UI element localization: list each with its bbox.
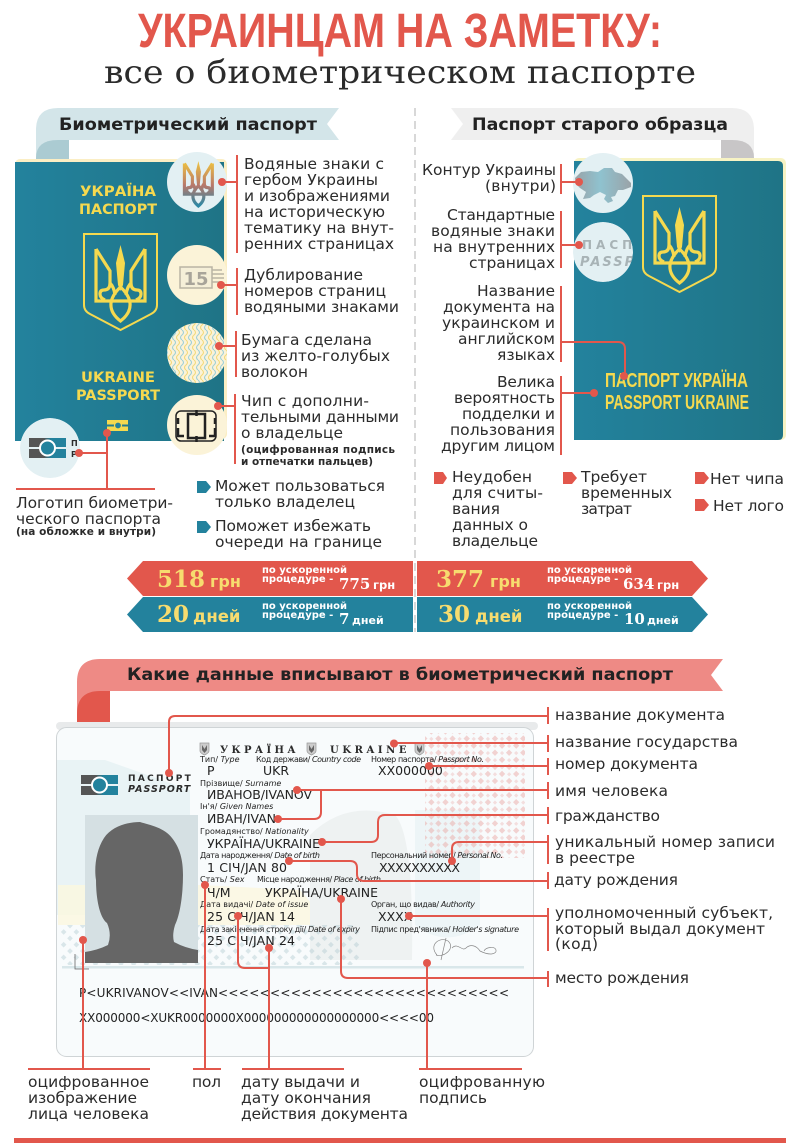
card fields: Ч/М xyxy=(207,885,231,900)
icon: chip xyxy=(167,395,227,455)
callout: watermarks: Водяные знаки с xyxy=(244,155,384,173)
price bar: old: по ускоренной xyxy=(547,565,632,576)
heading ribbon: old passport xyxy=(451,108,754,160)
callout: watermarks: на внутренних xyxy=(433,238,555,256)
price bar: old: грн xyxy=(657,578,679,592)
leader: portrait: оцифрованное xyxy=(28,1073,149,1091)
term bar: old: 10 xyxy=(624,610,645,628)
subtitle: все о биометрическом паспорте xyxy=(104,53,696,91)
callout: chip: и отпечатки пальцев) xyxy=(241,456,373,468)
heading ribbon: data: Какие данные вписывают в биометрический паспорт xyxy=(127,665,673,684)
term bar: old: по ускоренной xyxy=(547,601,632,612)
card fields: Код держави/ Country code xyxy=(256,755,361,764)
leader: name: имя человека xyxy=(555,782,668,800)
leader: name xyxy=(274,782,668,823)
center divider xyxy=(414,108,416,632)
card heading xyxy=(200,743,424,756)
card fields: XXXXXXXXXX xyxy=(379,860,460,875)
leader: state name: название государства xyxy=(555,733,738,751)
callout: forgery: вероятность xyxy=(454,389,555,407)
leader: document number: номер документа xyxy=(555,755,698,773)
price bar: biometric: грн xyxy=(373,578,395,592)
price bar: old xyxy=(417,561,708,596)
card fields: Персональний номер/ Personal No. xyxy=(371,851,503,860)
callout: forgery: Велика xyxy=(497,373,555,391)
callout: logo: (на обложке и внутри) xyxy=(16,526,156,538)
term bar: biometric: по ускоренной xyxy=(262,601,347,612)
passport cover: УКРАЇНА xyxy=(80,183,157,200)
portrait xyxy=(85,815,198,963)
term bar: old xyxy=(417,597,708,632)
card fields: UKR xyxy=(263,763,289,778)
callout: document name: Название xyxy=(477,282,555,300)
bottom rule xyxy=(14,1138,786,1143)
leader: registry number: уникальный номер записи xyxy=(555,833,775,851)
callout: outline: Контур Украины xyxy=(422,161,556,179)
leader: authority xyxy=(405,904,773,953)
leader: birth date xyxy=(285,857,678,889)
card fields: ИВАНОВ/IVANOV xyxy=(207,787,312,802)
card fields: 1 СІЧ/JAN 80 xyxy=(207,860,287,875)
callout: forgery xyxy=(441,373,598,455)
callout: watermarks: гербом Украины xyxy=(244,171,378,189)
bullet: owner only: Может пользоваться xyxy=(215,477,385,495)
panel: old passport xyxy=(422,108,786,550)
leader: portrait: лица человека xyxy=(28,1105,149,1123)
bullet: time: временных xyxy=(581,484,672,502)
term bar: biometric: 7 xyxy=(339,610,349,628)
card fields: Дата видачі/ Date of issue xyxy=(200,900,308,909)
term bar: biometric: 20 xyxy=(157,601,189,628)
machine readable zone: XX000000<XUKR0000000X000000000000000000<<<<00 xyxy=(79,1011,434,1025)
term bar: biometric: процедуре - xyxy=(262,610,333,621)
term bar: old: 30 xyxy=(438,601,470,628)
passport cover xyxy=(574,158,786,440)
bullet: inconvenient xyxy=(434,468,543,550)
icon: Ukraine outline xyxy=(573,153,633,213)
panel: ID card xyxy=(56,722,538,1056)
heading ribbon: old passport: Паспорт старого образца xyxy=(472,115,728,134)
bullet: border queue xyxy=(197,517,382,551)
icon: page number: 15 xyxy=(184,269,208,290)
card fields: Номер паспорта/ Passport No. xyxy=(371,755,484,764)
callout: outline xyxy=(422,161,583,195)
callout: watermarks xyxy=(431,206,583,272)
card logo: ПАСПОРТ xyxy=(128,774,193,784)
callout: document name: английском xyxy=(458,330,555,348)
callout: chip: тельными данными xyxy=(241,408,399,426)
card fields: УКРАЇНА/UKRAINE xyxy=(207,836,320,851)
price bar: old: процедуре - xyxy=(547,574,618,585)
signature xyxy=(434,938,496,960)
icon: yellow-blue fibres xyxy=(167,323,227,383)
callout: logo xyxy=(16,429,173,538)
term bar: old: дней xyxy=(647,614,679,627)
leader: document name: название документа xyxy=(555,706,725,724)
callout: chip: о владельце xyxy=(241,424,343,442)
callout: chip xyxy=(214,392,399,468)
leader: dates: действия документа xyxy=(241,1105,408,1123)
callout: forgery: другим лицом xyxy=(441,437,555,455)
icon: biometric logo: П xyxy=(71,439,78,448)
callout: page numbers: Дублирование xyxy=(244,266,363,284)
passport cover xyxy=(15,159,227,441)
card fields: Дата народження/ Date of birth xyxy=(200,851,320,860)
price bar: old: 634 xyxy=(623,575,654,593)
bullet: inconvenient: Неудобен xyxy=(452,468,532,486)
term bar: biometric: дней xyxy=(193,607,240,626)
machine readable zone xyxy=(79,986,509,1025)
callout: paper xyxy=(215,331,390,381)
callout: document name: документа на xyxy=(443,298,555,316)
panel: biometric passport xyxy=(15,108,399,551)
card fields: УКРАЇНА/UKRAINE xyxy=(265,885,378,900)
leader: document number xyxy=(425,755,698,775)
leader: registry number: в реестре xyxy=(555,849,635,867)
card fields: Ін'я/ Given Names xyxy=(200,802,273,811)
callout: page numbers: водяными знаками xyxy=(244,298,399,316)
callout: chip: (оцифрованная подпись xyxy=(241,444,395,456)
callout: watermarks: ренних страницах xyxy=(244,235,394,253)
card fields: Орган, що видав/ Authority xyxy=(371,900,475,909)
card fields: P xyxy=(207,763,215,778)
leader: signature: оцифрованную xyxy=(419,1073,545,1091)
leader: nationality: гражданство xyxy=(555,807,660,825)
callout: watermarks: и изображениями xyxy=(244,187,390,205)
price bar: old: 377 xyxy=(436,566,484,593)
bullet: inconvenient: данных о xyxy=(452,516,528,534)
card heading: UKRAINE xyxy=(330,745,410,756)
heading ribbon: biometric passport: Биометрический паспорт xyxy=(59,115,317,134)
passport cover: PASSPORT xyxy=(76,388,160,404)
term bar: biometric: дней xyxy=(352,614,384,627)
term bar: old: процедуре - xyxy=(547,610,618,621)
passport cover: ПАСПОРТ УКРАЇНА xyxy=(605,369,748,392)
bullet: time: затрат xyxy=(581,500,632,518)
icon: standard watermarks: PASSP xyxy=(580,255,636,270)
leader: birth date: дату рождения xyxy=(554,871,678,889)
heading ribbon: data xyxy=(77,659,723,727)
card fields: XX000000 xyxy=(378,763,443,778)
title: УКРАИНЦАМ НА ЗАМЕТКУ: xyxy=(138,5,662,58)
card logo xyxy=(81,774,193,795)
price bar: biometric xyxy=(127,561,413,596)
icon: standard watermarks: ПАСП xyxy=(582,238,636,252)
card fields: Місце народження/ Place of birth xyxy=(257,875,381,884)
callout: logo: ческого паспорта xyxy=(16,510,161,528)
callout: watermarks: тематику на внут- xyxy=(244,219,394,237)
bullet: inconvenient: владельце xyxy=(452,532,538,550)
bullet: no chip: Нет чипа xyxy=(710,470,784,488)
price bar: biometric: 775 xyxy=(339,575,370,593)
icon: standard watermarks xyxy=(573,222,636,282)
callout: watermarks: на историческую xyxy=(244,203,385,221)
card fields: Підпис пред'явника/ Holder's signature xyxy=(371,925,519,934)
bullet: border queue: Поможет избежать xyxy=(215,517,371,535)
callout: watermarks xyxy=(218,155,394,253)
price bar: biometric: процедуре - xyxy=(262,574,333,585)
price bar: biometric: по ускоренной xyxy=(262,565,347,576)
term bar: biometric xyxy=(127,597,413,632)
bullet: time xyxy=(563,468,672,518)
card fields: Дата закінчення строку дії/ Date of expiry xyxy=(200,925,360,934)
leader: portrait xyxy=(28,936,150,1123)
bullet: inconvenient: для считы- xyxy=(452,484,543,502)
leader: birth place xyxy=(337,895,689,987)
callout: document name: языках xyxy=(497,346,555,364)
callout: paper: Бумага сделана xyxy=(241,331,372,349)
heading ribbon: biometric passport xyxy=(36,108,339,160)
icon: page number xyxy=(167,245,227,305)
leader: document name xyxy=(165,706,725,777)
card logo: PASSPORT xyxy=(128,784,192,795)
term bar: old: дней xyxy=(475,607,522,626)
callout: logo: Логотип биометри- xyxy=(16,494,173,512)
callout: watermarks: страницах xyxy=(469,254,555,272)
leader: dates: дату окончания xyxy=(241,1089,371,1107)
price bar: biometric: 518 xyxy=(157,566,205,593)
machine readable zone: P<UKRIVANOV<<IVAN xyxy=(79,986,218,1000)
leader: registry number xyxy=(448,833,775,867)
card fields: 25 СІЧ/JAN 24 xyxy=(207,933,295,948)
callout: document name: украинском и xyxy=(442,314,555,332)
icon: biometric logo xyxy=(20,418,80,478)
bullet: no logo: Нет лого xyxy=(713,497,784,515)
callout: paper: из желто-голубых xyxy=(241,347,390,365)
bullet: time: Требует xyxy=(580,468,647,486)
callout: document name xyxy=(442,282,628,380)
card fields: Стать/ Sex xyxy=(200,875,245,884)
leader: authority: (код) xyxy=(555,935,598,953)
callout: outline: (внутри) xyxy=(485,177,556,195)
leader: sex xyxy=(192,881,221,1091)
leader: authority: уполномоченный субъект, xyxy=(555,904,773,922)
bullet: owner only: только владелец xyxy=(215,493,355,511)
leader: nationality xyxy=(318,807,660,846)
callout: page numbers xyxy=(217,266,399,316)
leader: sex: пол xyxy=(192,1073,221,1091)
price bar: biometric: грн xyxy=(210,572,241,591)
card fields xyxy=(199,755,519,948)
leader: dates: дату выдачи и xyxy=(241,1073,360,1091)
bullet: inconvenient: вания xyxy=(452,500,500,518)
price bar: old: грн xyxy=(490,572,521,591)
card fields: Громадянство/ Nationality xyxy=(200,827,309,836)
card fields: Тип/ Type xyxy=(199,755,240,764)
leader: dates xyxy=(234,912,408,1123)
callout: watermarks: Стандартные xyxy=(447,206,555,224)
leader: birth place: место рождения xyxy=(555,969,689,987)
machine readable zone: <<<<<<<<<<<<<<<<<<<<<<<<<<<< xyxy=(218,986,509,1000)
card fields: 25 СІЧ/JAN 14 xyxy=(207,909,295,924)
callout: watermarks: водяные знаки xyxy=(431,222,555,240)
leader: authority: который выдал документ xyxy=(555,920,765,938)
card fields: Прізвище/ Surname xyxy=(200,779,281,788)
bullet: owner only xyxy=(197,477,385,511)
card fields: ИВАН/IVAN xyxy=(207,811,276,826)
card heading: УКРАЇНА xyxy=(220,743,299,756)
passport cover: ПАСПОРТ xyxy=(79,202,157,218)
card fields: XXXX xyxy=(378,909,413,924)
callout: paper: волокон xyxy=(241,363,308,381)
leader: signature xyxy=(419,959,545,1107)
leader: signature: подпись xyxy=(419,1089,487,1107)
passport cover: UKRAINE xyxy=(81,370,155,386)
leader: state name xyxy=(390,733,738,752)
callout: page numbers: номеров страниц xyxy=(244,282,386,300)
callout: chip: Чип с дополни- xyxy=(241,392,369,410)
bullet: border queue: очереди на границе xyxy=(215,533,382,551)
callout: forgery: подделки и xyxy=(462,405,555,423)
leader: portrait: изображение xyxy=(28,1089,137,1107)
icon: biometric logo: P xyxy=(71,450,77,459)
callout: forgery: пользования xyxy=(450,421,555,439)
icon: watermark trident xyxy=(167,152,227,212)
